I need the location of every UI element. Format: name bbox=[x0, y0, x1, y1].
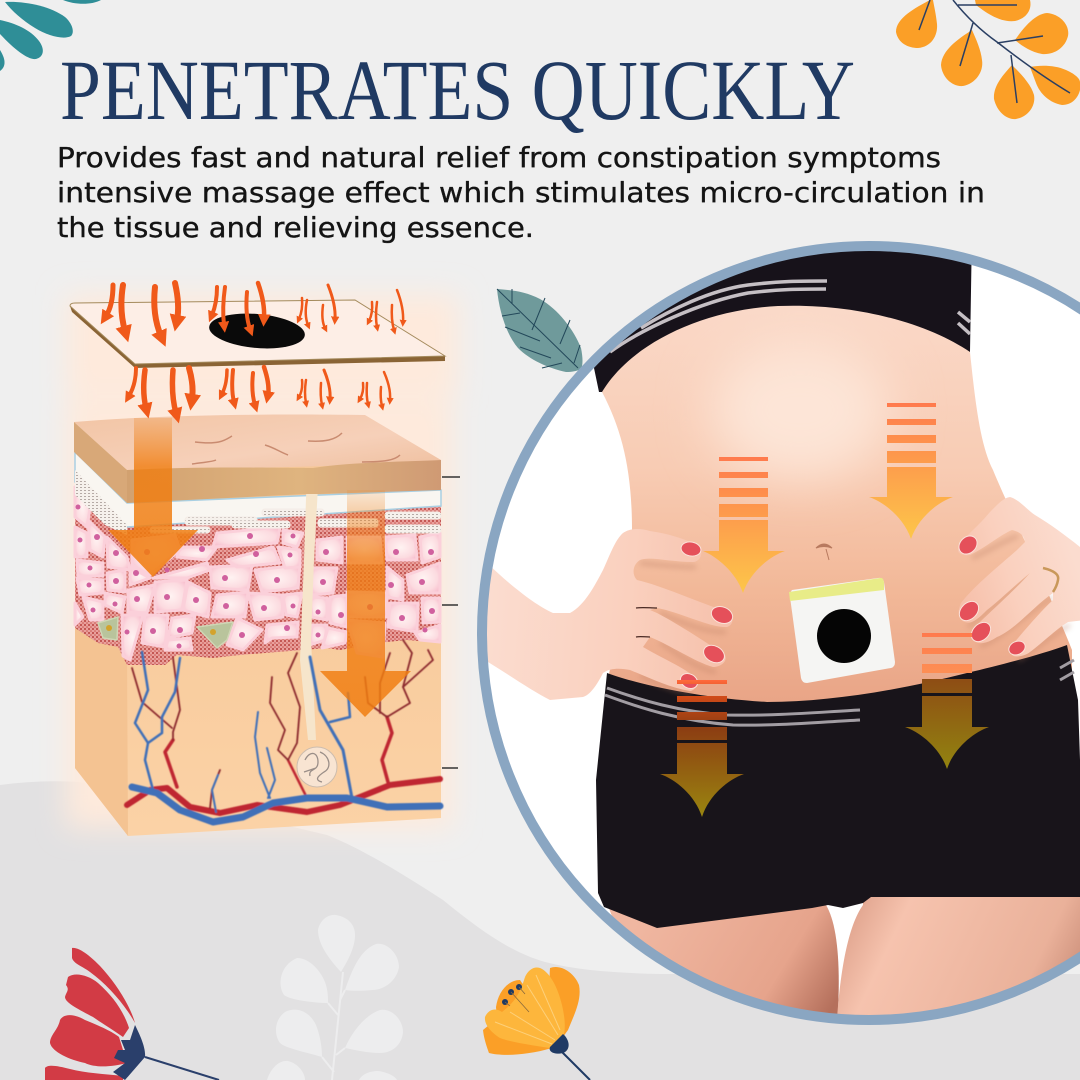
ring bbox=[1043, 568, 1058, 592]
block base bbox=[75, 460, 441, 836]
description text: the tissue and relieving essence. bbox=[57, 212, 534, 244]
legs bbox=[609, 905, 839, 1014]
white subcutaneous layers bbox=[75, 452, 441, 527]
heat patch bbox=[70, 300, 445, 368]
title: PENETRATES QUICKLY bbox=[60, 42, 855, 138]
green cells bbox=[98, 617, 233, 648]
diagram label ticks bbox=[442, 477, 460, 768]
finger shadow bbox=[640, 563, 726, 694]
description text: Provides fast and natural relief from constipation symptoms bbox=[57, 142, 941, 174]
small heat arrows below patch bbox=[129, 367, 390, 413]
cell nuclei bbox=[76, 504, 435, 648]
gradient arrow C bbox=[905, 633, 989, 769]
left arm and hand bbox=[480, 529, 735, 700]
hair shaft bbox=[300, 468, 319, 740]
top surface bbox=[74, 415, 441, 470]
black top bbox=[594, 251, 972, 392]
skin surface creases bbox=[192, 433, 400, 464]
decoration: red flower bottom left bbox=[45, 948, 219, 1080]
decoration: orange leaves top right bbox=[896, 0, 1080, 119]
torso highlight bbox=[710, 340, 890, 480]
description text: intensive massage effect which stimulates micro-circulation in bbox=[57, 177, 985, 209]
blood vessels bbox=[127, 640, 440, 822]
shorts bbox=[596, 645, 1080, 928]
cell layer bbox=[75, 470, 441, 665]
large orange arrow right bbox=[320, 490, 411, 717]
torso bbox=[602, 300, 1072, 715]
circle border bbox=[482, 246, 1080, 1020]
diagram glow bbox=[66, 295, 458, 828]
decoration: pale leaves bbox=[267, 915, 403, 1080]
left finger creases bbox=[636, 608, 657, 637]
background hill shape bbox=[0, 781, 1080, 1080]
right hand bbox=[955, 497, 1080, 660]
skin cross-section block bbox=[74, 415, 441, 836]
patch on abdomen bbox=[789, 578, 895, 683]
navel bbox=[816, 544, 832, 560]
right hand nails bbox=[958, 535, 1026, 656]
small heat arrows above patch bbox=[106, 283, 403, 336]
description text bbox=[57, 142, 985, 244]
cells bbox=[75, 487, 440, 660]
decoration: teal leaf bbox=[497, 289, 582, 372]
gradient arrow B bbox=[869, 403, 953, 539]
right finger shadow bbox=[968, 536, 1070, 660]
photo circle: abdomen with patch bbox=[480, 230, 1080, 1040]
gradient arrow D bbox=[660, 680, 744, 817]
large orange arrow left bbox=[108, 418, 198, 577]
decoration: orange flower bbox=[483, 967, 590, 1080]
sweat gland bbox=[297, 747, 337, 787]
left hand nails bbox=[678, 540, 735, 691]
gradient arrow A bbox=[703, 457, 785, 593]
decoration: teal leaves top left bbox=[0, 0, 101, 71]
